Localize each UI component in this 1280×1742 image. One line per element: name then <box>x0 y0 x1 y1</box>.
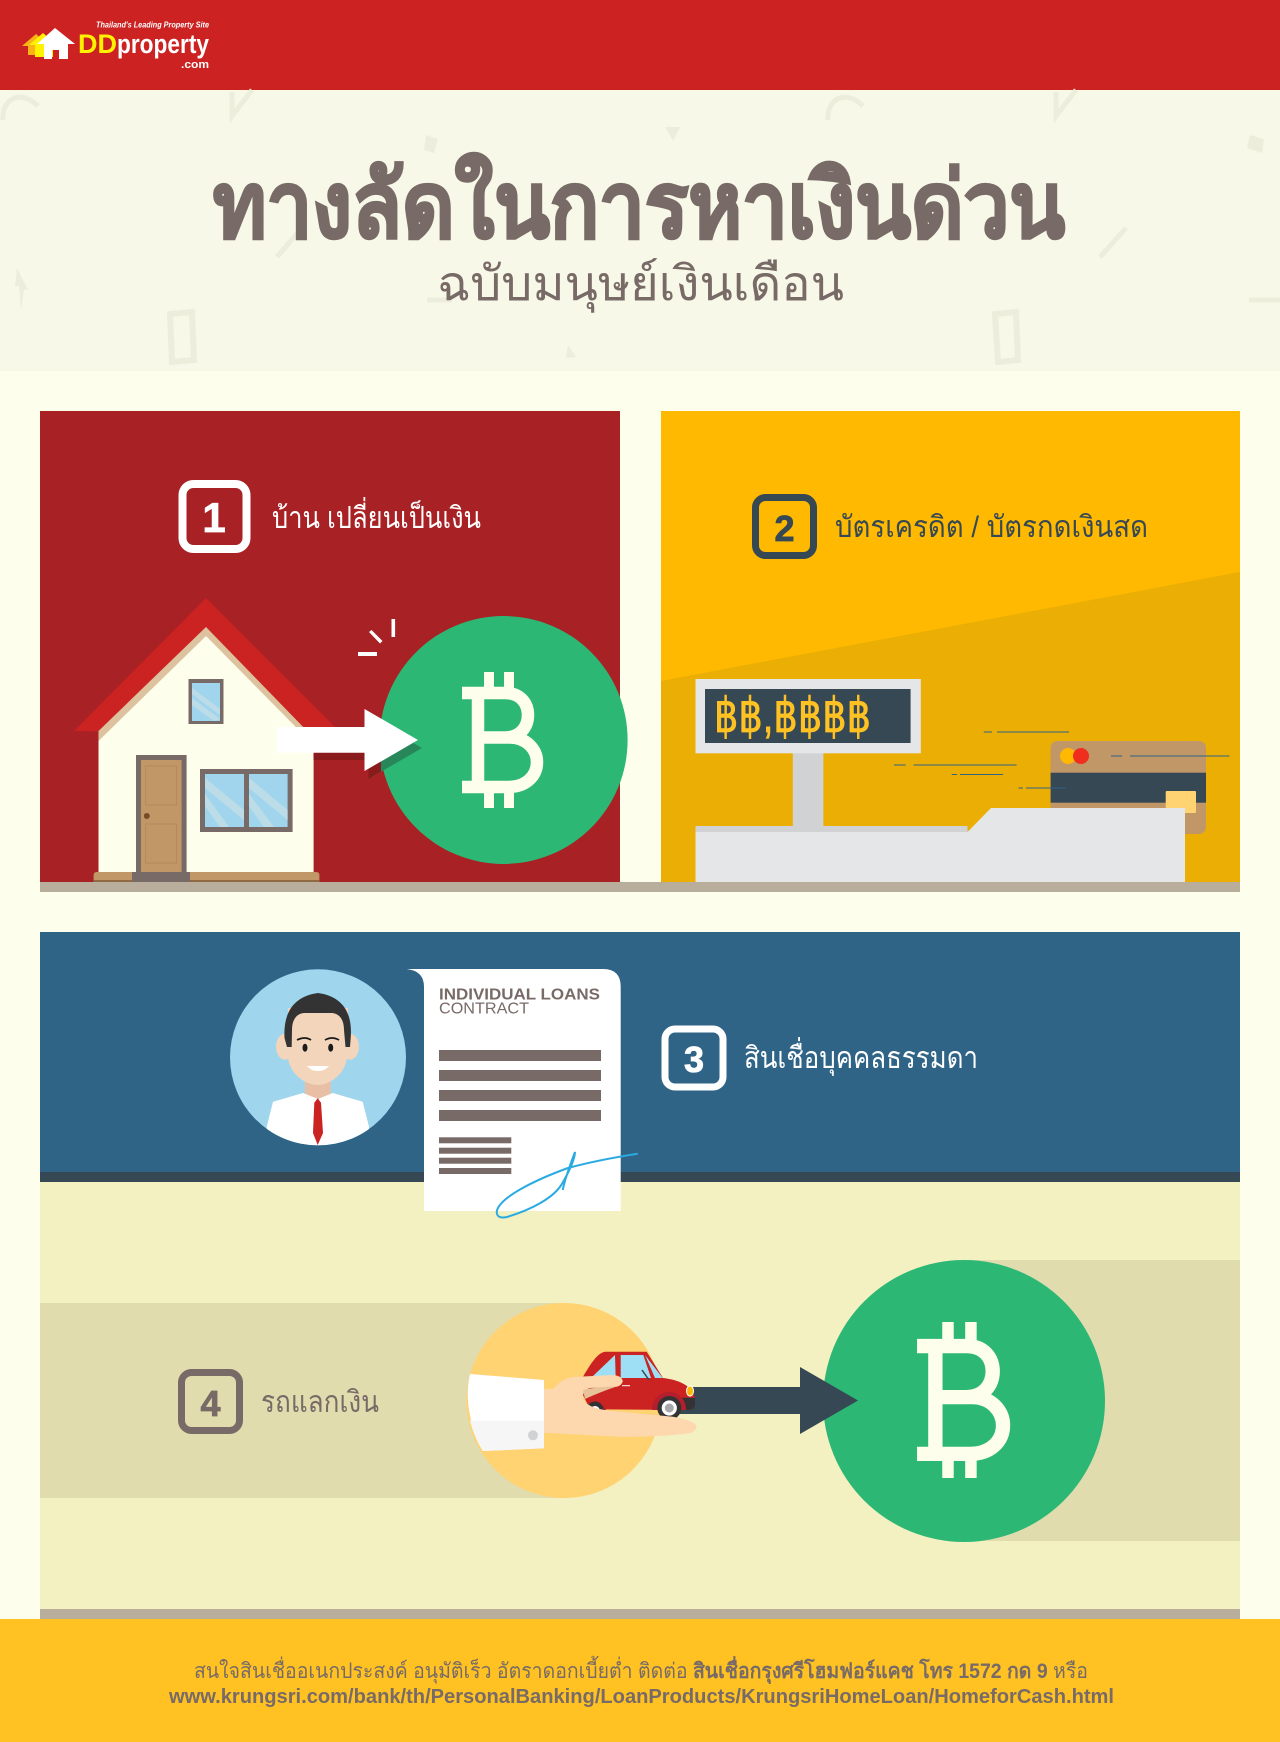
panel 2: credit card <box>661 411 1240 882</box>
badge 3: 3 <box>684 1039 704 1080</box>
panel 3: personal loans <box>40 932 1240 1217</box>
badge 2: 2 <box>774 508 795 549</box>
badge 4 <box>182 1372 240 1430</box>
icon: yellow circle <box>466 1303 662 1498</box>
contract document <box>407 969 638 1217</box>
panel 4: car to cash <box>182 1260 1105 1542</box>
badge 1 <box>182 484 246 549</box>
subtitle: ฉบับมนุษย์เงินเดือน <box>437 258 844 313</box>
badge 4: 4 <box>200 1383 221 1424</box>
logo: DDproperty: Thailand's Leading Property Site <box>96 20 209 30</box>
signature <box>497 1152 638 1217</box>
heading 2: บัตรเครดิต / บัตรกดเงินสด <box>835 511 1148 544</box>
icon: businessman portrait <box>230 969 406 1150</box>
price display and counter: ฿฿,฿฿฿฿ <box>714 690 871 743</box>
icon: baht coin large <box>823 1260 1105 1542</box>
footer <box>0 1619 1280 1742</box>
heading 4: รถแลกเงิน <box>261 1386 379 1419</box>
icon: house <box>74 598 335 882</box>
arrow: house to coin <box>276 709 422 779</box>
footer contact line: สนใจสินเชื่ออเนกประสงค์ อนุมัติเร็ว อัตราดอกเบี้ยต่ำ ติดต่อ สินเชื่อกรุงศรีโฮมฟอร์แคช โทร 1572 กด 9 หรือ <box>194 1655 1088 1685</box>
speed lines <box>894 732 1229 788</box>
logo: DDproperty: property <box>117 29 209 59</box>
icon: car <box>583 1352 695 1420</box>
title band <box>0 90 1280 371</box>
panel 1: house to cash <box>40 411 628 882</box>
ground line: panel 4 <box>40 1609 1240 1619</box>
icon: sparkle lines <box>358 619 395 656</box>
logo: DDproperty: .com <box>181 59 209 71</box>
header bar <box>0 0 1280 90</box>
title: ทางลัดในการหาเงินด่วน <box>213 153 1065 257</box>
icon: baht coin <box>380 616 628 864</box>
icon: credit card <box>1051 741 1206 834</box>
ground line: panels 1 and 2 <box>40 882 1240 892</box>
icon: hand and sleeve <box>468 1374 697 1451</box>
arrow: car to coin <box>670 1367 858 1434</box>
badge 3 <box>665 1029 723 1087</box>
contract document: INDIVIDUAL LOANS <box>439 986 600 1004</box>
badge 2 <box>756 498 814 556</box>
price display and counter <box>696 679 1185 882</box>
logo: DDproperty <box>22 20 209 71</box>
heading 3: สินเชื่อบุคคลธรรมดา <box>744 1037 978 1077</box>
badge 1: 1 <box>202 494 226 541</box>
heading 1: บ้าน เปลี่ยนเป็นเงิน <box>272 497 481 535</box>
panel 4 background <box>40 1182 1240 1610</box>
footer url: www.krungsri.com/bank/th/PersonalBanking/LoanProducts/KrungsriHomeLoan/HomeforCash.html <box>168 1686 1114 1708</box>
logo: DDproperty: DD <box>78 29 117 59</box>
contract document: CONTRACT <box>439 1001 530 1018</box>
